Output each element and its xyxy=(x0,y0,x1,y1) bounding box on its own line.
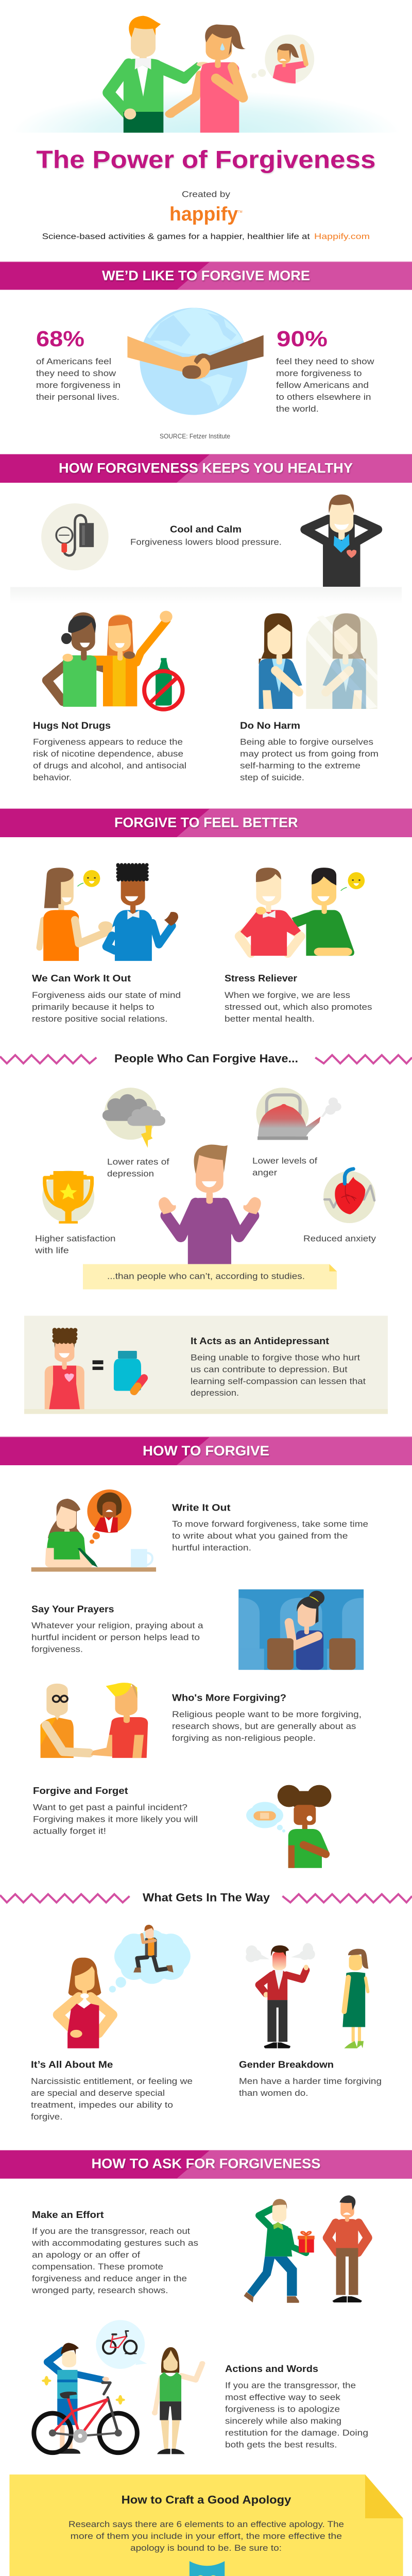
icon: sad mask xyxy=(190,2561,225,2576)
apology icons upper xyxy=(45,2561,378,2576)
floor shadow xyxy=(10,587,402,604)
illustration: woman facing mirror xyxy=(259,613,377,709)
text: actions and words: most effective way to seek xyxy=(225,2393,341,2402)
folded corner xyxy=(365,2475,403,2518)
illustration: woman writing at desk xyxy=(31,1489,156,1572)
illustration: man with repaired bike and woman xyxy=(34,2320,205,2454)
panel: gender breakdown xyxy=(239,1943,382,2098)
stat: 90%: more forgiveness to xyxy=(276,369,362,378)
heading: what gets in the way: What Gets In The Way xyxy=(143,1891,270,1904)
apology intro: Research says there are 6 elements to an effective apology. The xyxy=(68,2520,344,2529)
text: forgive and forget: Want to get past a painful incident? xyxy=(33,1803,187,1812)
banner: forgive to feel better: FORGIVE TO FEEL BETTER xyxy=(114,815,298,831)
tagline: Science-based activities & games for a happier, healthier life at xyxy=(42,232,310,241)
text: make an effort: compensation. These promote xyxy=(32,2262,163,2272)
text: cool and calm: Forgiveness lowers blood pressure. xyxy=(130,537,282,547)
label: higher satisfaction with life xyxy=(35,1234,116,1255)
text: who's more forgiving: research shows, but are generally about as xyxy=(172,1722,356,1731)
illustration: woman imagining admirer xyxy=(58,1925,191,2048)
panel: do no harm xyxy=(240,613,379,783)
banner: we'd like to forgive more: WE’D LIKE TO FORGIVE MORE xyxy=(102,268,310,283)
text: make an effort: forgiveness and reduce anger in the xyxy=(32,2274,187,2283)
label: higher satisfaction with life: with life xyxy=(35,1246,69,1255)
banner: how to ask for forgiveness xyxy=(0,2150,412,2179)
illustration: two people talking xyxy=(40,865,178,961)
text: stress reliever: better mental health. xyxy=(225,1014,315,1024)
stat: 68%: they need to show xyxy=(36,369,116,378)
text: actions and words: If you are the transgressor, the xyxy=(225,2381,356,2391)
text: actions and words xyxy=(225,2363,368,2449)
text: do no harm: Being able to forgive ourselves xyxy=(240,738,373,747)
banner: how forgiveness keeps you healthy: HOW FORGIVENESS KEEPS YOU HEALTHY xyxy=(59,461,353,476)
text: say your prayers: forgiveness. xyxy=(31,1645,83,1654)
illustration: globe and handshake xyxy=(127,308,264,415)
text: forgive and forget xyxy=(33,1785,198,1836)
text: actions and words: Actions and Words xyxy=(225,2363,318,2374)
banner: how to ask for forgiveness: HOW TO ASK FOR FORGIVENESS xyxy=(92,2156,320,2171)
icon: blood pressure cuff xyxy=(41,503,109,570)
text: actions and words: forgiveness is to apologize xyxy=(225,2404,340,2414)
text: say your prayers: Whatever your religion, praying about a xyxy=(31,1621,203,1631)
stat: 90%: to others elsewhere in xyxy=(276,393,371,402)
panel: benefits of forgiving xyxy=(35,1088,376,1290)
text: make an effort: wronged party, research shows. xyxy=(31,2286,168,2295)
heading: what gets in the way xyxy=(0,1891,412,1904)
text: it's all about me: are special and deserve special xyxy=(31,2089,165,2098)
text: who's more forgiving: Religious people want to be more forgiving, xyxy=(172,1710,362,1719)
text: stress reliever: Stress Reliever xyxy=(225,973,297,984)
text: it's all about me xyxy=(31,2059,193,2122)
illustration: angry man and calm woman xyxy=(246,1943,368,2048)
heading: people who can forgive have: People Who Can Forgive Have... xyxy=(114,1052,298,1065)
text: make an effort: an apology or an offer of xyxy=(32,2250,140,2260)
panel: make an effort xyxy=(31,2195,368,2303)
text: actions and words: restitution for the damage. Doing xyxy=(225,2428,368,2437)
banner: how forgiveness keeps you healthy xyxy=(0,454,412,483)
illustration: friends and bottle xyxy=(47,611,183,709)
text: forgive and forget: Forgive and Forget xyxy=(33,1785,128,1796)
text: do no harm: Do No Harm xyxy=(240,720,300,731)
text: gender breakdown: than women do. xyxy=(239,2089,308,2098)
icon: heart with pulse xyxy=(323,1169,375,1223)
text: we can work it out: primarily because it helps to xyxy=(32,1003,154,1012)
icon: trophy xyxy=(42,1171,94,1224)
stat: 68% xyxy=(36,327,121,402)
text: we can work it out: restore positive social relations. xyxy=(32,1014,168,1024)
text: stress reliever: When we forgive, we are less xyxy=(225,991,350,1000)
panel: say your prayers xyxy=(31,1589,364,1670)
stat: 90% xyxy=(276,327,374,414)
label: lower levels of anger: Lower levels of xyxy=(252,1156,317,1165)
text: who's more forgiving: forgiving as non-religious people. xyxy=(172,1734,316,1743)
created by: Created by xyxy=(182,190,231,199)
label: lower rates of depression: depression xyxy=(107,1169,154,1178)
text: we can work it out: We Can Work It Out xyxy=(32,973,131,984)
note: than people who can't xyxy=(83,1264,337,1290)
stat: 68%: 68% xyxy=(36,327,84,351)
panel: actions and words xyxy=(34,2320,368,2454)
text: gender breakdown: Gender Breakdown xyxy=(239,2059,334,2070)
text: write it out: to write about what you gained from the xyxy=(172,1532,348,1541)
stat: 90%: feel they need to show xyxy=(276,357,374,366)
text: antidepressant: us can contribute to depression. But xyxy=(191,1365,348,1374)
label: higher satisfaction with life: Higher satisfaction xyxy=(35,1234,115,1244)
label: lower levels of anger: anger xyxy=(252,1168,278,1177)
apology heading: How to Craft a Good Apology xyxy=(122,2493,291,2506)
text: forgive and forget: Forgiving makes it more likely you will xyxy=(33,1815,198,1824)
text: hugs not drugs: behavior. xyxy=(33,773,72,783)
text: write it out: To move forward forgiveness, take some time xyxy=(172,1520,368,1529)
text: write it out: Write It Out xyxy=(172,1502,231,1513)
text: hugs not drugs: Forgiveness appears to reduce the xyxy=(33,738,183,747)
stat: 90%: 90% xyxy=(277,327,328,351)
logo: happify: happify xyxy=(169,204,238,225)
title: The Power of Forgiveness xyxy=(36,146,375,174)
heading: people who can forgive have xyxy=(0,1052,412,1065)
panel: who's more forgiving xyxy=(41,1683,362,1758)
text: it's all about me: It’s All About Me xyxy=(31,2059,113,2070)
panel: it's all about me xyxy=(31,1925,193,2122)
apology intro xyxy=(68,2520,344,2553)
text: cool and calm: Cool and Calm xyxy=(170,524,242,535)
illustration: person equals pill bottle xyxy=(45,1329,144,1409)
text: antidepressant: Being unable to forgive those who hurt xyxy=(191,1353,360,1362)
panel: we can work it out xyxy=(32,865,181,1024)
illustration: woman praying in church xyxy=(238,1589,364,1670)
text: antidepressant: depression. xyxy=(191,1388,239,1398)
text: we can work it out xyxy=(32,973,181,1024)
text: say your prayers: hurtful incident or person helps lead to xyxy=(31,1633,200,1642)
illustration: girl thinking of bandage xyxy=(246,1785,331,1868)
text: make an effort: Make an Effort xyxy=(32,2209,104,2220)
stat: 90%: the world. xyxy=(276,404,319,414)
text: it's all about me: Narcissistic entitlement, or feeling we xyxy=(31,2077,193,2086)
text: gender breakdown xyxy=(239,2059,382,2098)
banner: forgive to feel better xyxy=(0,808,412,837)
icons and person xyxy=(42,1088,375,1264)
source note: SOURCE: Fetzer Institute xyxy=(160,433,230,440)
text: make an effort: with accommodating gestures such as xyxy=(31,2239,198,2248)
label: reduced anxiety: Reduced anxiety xyxy=(303,1234,376,1244)
text: say your prayers xyxy=(31,1603,203,1654)
text: antidepressant: learning self-compassion can lessen that xyxy=(191,1377,366,1386)
text: actions and words: both gets the best results. xyxy=(225,2440,337,2449)
text: who's more forgiving xyxy=(172,1692,362,1743)
panel: hero xyxy=(11,16,401,241)
panel: stress reliever xyxy=(225,868,372,1024)
text: write it out: hurtful interaction. xyxy=(172,1544,251,1553)
text: antidepressant: It Acts as an Antidepressant xyxy=(191,1335,329,1346)
figure: happy man xyxy=(159,1145,261,1264)
panel: cool and calm xyxy=(10,495,402,604)
panel: hugs not drugs xyxy=(33,611,186,783)
apology intro: apology is bound to be. Be sure to: xyxy=(130,2544,282,2553)
illustration: monk shaking hands xyxy=(41,1683,148,1758)
icon: storm clouds xyxy=(102,1088,165,1148)
banner: we'd like to forgive more xyxy=(0,262,412,290)
text: do no harm: step of suicide. xyxy=(240,773,304,783)
label: lower levels of anger xyxy=(252,1156,317,1177)
text: hugs not drugs: of drugs and alcohol, and antisocial xyxy=(33,761,186,771)
text: make an effort: If you are the transgressor, reach out xyxy=(32,2227,190,2236)
text: actions and words: sincerely while also making xyxy=(225,2416,341,2426)
tagline xyxy=(42,232,370,241)
text: gender breakdown: Men have a harder time forgiving xyxy=(239,2077,382,2086)
stat: 68%: of Americans feel xyxy=(36,357,111,366)
panel: statistics xyxy=(36,308,374,440)
text: hugs not drugs: Hugs Not Drugs xyxy=(33,720,111,731)
text: do no harm xyxy=(240,720,379,783)
stat: 68%: their personal lives. xyxy=(36,393,119,402)
text: antidepressant xyxy=(191,1335,366,1398)
illustration: two friends with arm around xyxy=(239,868,365,956)
tagline: Happify.com xyxy=(314,232,370,241)
text: write it out xyxy=(172,1502,368,1553)
label: lower rates of depression: Lower rates of xyxy=(107,1157,169,1166)
text: stress reliever: stressed out, which also promotes xyxy=(225,1003,372,1012)
banner: how to forgive xyxy=(0,1436,412,1465)
note: than people who can't: ...than people who can’t, according to studies. xyxy=(107,1272,305,1281)
panel: write it out xyxy=(31,1489,368,1572)
text: forgive and forget: actually forget it! xyxy=(33,1827,106,1836)
panel: forgive and forget xyxy=(33,1785,331,1868)
text: it's all about me: forgive. xyxy=(31,2112,62,2122)
logo: happify: TM xyxy=(238,211,243,214)
text: make an effort xyxy=(31,2209,198,2295)
icon: boiling kettle xyxy=(256,1088,341,1140)
panel: antidepressant xyxy=(24,1316,388,1414)
text: do no harm: may protect us from going from xyxy=(240,750,379,759)
text: who's more forgiving: Who's More Forgiving? xyxy=(172,1692,286,1703)
stat: 68%: more forgiveness in xyxy=(36,381,121,390)
text: hugs not drugs: risk of nicotine dependence, abuse xyxy=(33,750,183,759)
text: it's all about me: treatment, impedes our ability to xyxy=(31,2100,173,2110)
text: do no harm: self-harming to the extreme xyxy=(240,761,360,771)
apology intro: more of them you include in your effort, the more effective the xyxy=(71,2532,342,2541)
illustration: man comforting crying woman xyxy=(11,16,401,133)
stat: 90%: fellow Americans and xyxy=(276,381,369,390)
note background xyxy=(9,2475,403,2576)
text: say your prayers: Say Your Prayers xyxy=(31,1603,114,1614)
text: we can work it out: Forgiveness aids our state of mind xyxy=(32,991,181,1000)
text: hugs not drugs xyxy=(33,720,186,783)
panel: how to craft a good apology xyxy=(9,2475,403,2576)
text: stress reliever xyxy=(225,973,372,1024)
illustration: man offering gift xyxy=(244,2195,368,2303)
banner: how to forgive: HOW TO FORGIVE xyxy=(143,1443,269,1459)
label: lower rates of depression xyxy=(107,1157,169,1178)
illustration: relaxed man xyxy=(305,495,378,587)
text: cool and calm xyxy=(130,524,282,547)
